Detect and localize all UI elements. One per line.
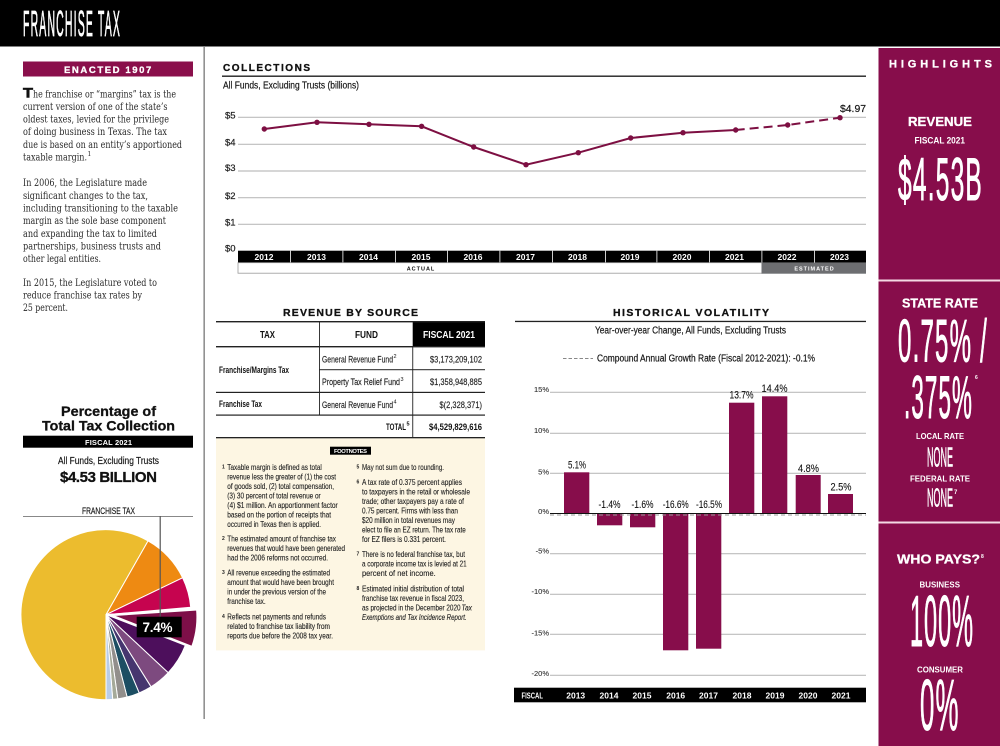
table: Property Tax Relief Fund [322, 377, 400, 388]
header band with page title [0, 0, 1000, 46]
footnotes panel: amount that would have been brought [227, 578, 335, 587]
table: $4,529,829,616 [429, 422, 482, 433]
intro text block: significant changes to the tax, [23, 191, 148, 202]
y axis labels: $4 [225, 138, 236, 148]
year axis bar: 2015 [412, 252, 431, 262]
footnotes panel [216, 438, 485, 650]
highlight: state rate [898, 295, 988, 513]
footnotes panel: a corporate income tax is levied at 21 [362, 560, 467, 568]
pie heading: FISCAL 2021 [85, 438, 132, 447]
footnotes panel: Exemptions and Tax Incidence Report. [362, 613, 467, 622]
panel: historical volatility bar chart [514, 307, 866, 702]
footnotes panel: franchise tax revenue in fiscal 2023, [362, 594, 464, 603]
intro text block: 25 percent. [23, 303, 68, 314]
pie heading: All Funds, Excluding Trusts [58, 455, 159, 467]
fiscal year axis bar: 2019 [766, 690, 785, 700]
year axis bar: 2017 [516, 252, 535, 262]
footnotes panel: 2 [222, 536, 225, 542]
actual and estimated key: ACTUAL [407, 266, 435, 272]
intro text block: due is based on an entity’s apportioned [23, 140, 182, 151]
y axis labels: $1 [225, 217, 236, 228]
footnotes panel: Estimated initial distribution of total [362, 584, 464, 593]
year axis bar: 2022 [778, 252, 797, 262]
table: Franchise/Margins Tax [219, 365, 289, 375]
y axis percent labels: 10% [534, 426, 549, 435]
y axis percent labels [531, 385, 549, 678]
intro text block: In 2015, the Legislature voted to [23, 278, 157, 289]
fiscal year axis bar: 2020 [799, 690, 818, 700]
highlight: state rate: 6 [975, 375, 978, 381]
volatility heading: Year-over-year Change, All Funds, Excluding Trusts [595, 326, 786, 336]
panel: highlights sidebar [878, 48, 1000, 746]
footnotes panel: based on the portion of receipts that [227, 510, 332, 520]
y axis labels [225, 110, 236, 254]
footnotes panel: Taxable margin is defined as total [227, 463, 322, 472]
year axis bar: 2018 [568, 252, 587, 262]
header band with page title: FRANCHISE TAX [23, 3, 121, 44]
footnotes panel: Tax [462, 603, 473, 612]
highlight: who pays: CONSUMER [917, 665, 963, 675]
table: $(2,328,371) [440, 400, 482, 411]
collections heading [222, 63, 866, 92]
collections line [262, 103, 866, 167]
volatility heading [515, 307, 866, 336]
bar value labels: 13.7% [730, 390, 754, 402]
year axis bar [238, 251, 866, 263]
bar value labels: 5.1% [568, 460, 586, 472]
y axis percent labels: -20% [531, 669, 549, 678]
collections heading: COLLECTIONS [223, 63, 310, 74]
footnotes panel: All revenue exceeding the estimated [227, 569, 330, 578]
footnotes panel: (4) $1 million. An apportionment factor [227, 501, 338, 510]
footnotes panel: revenue less the greater of (1) the cost [227, 472, 337, 482]
pie heading: Percentage of [61, 403, 156, 419]
footnotes panel: franchise tax. [227, 597, 266, 606]
fiscal year axis bar [514, 688, 866, 702]
table: General Revenue Fund [322, 400, 393, 411]
year axis bar: 2019 [621, 252, 640, 262]
growth rate legend: Compound Annual Growth Rate (Fiscal 2012-2021): -0.1% [597, 354, 815, 365]
bar value labels: -1.6% [632, 499, 654, 511]
footnotes panel: trade; other taxpayers pay a rate of [362, 497, 465, 506]
fiscal year axis bar: 2017 [699, 690, 718, 700]
table: General Revenue Fund [322, 354, 393, 366]
year axis bar: 2013 [307, 252, 326, 262]
footnotes panel: A tax rate of 0.375 percent applies [362, 478, 462, 487]
fiscal year axis bar: FISCAL [522, 690, 543, 700]
franchise tax leader line [160, 516, 161, 617]
footnotes panel: elect to file an EZ return. The tax rate [362, 526, 466, 534]
y axis labels: $0 [225, 244, 236, 254]
footnotes panel: The estimated amount of franchise tax [227, 535, 336, 544]
callout: 7.4 percent: 7.4% [142, 620, 172, 635]
y axis percent labels: -5% [536, 546, 549, 556]
bar value labels: -1.4% [598, 499, 621, 511]
year axis bar: 2012 [255, 252, 274, 262]
year axis bar: 2016 [464, 252, 483, 262]
bar value labels: -16.5% [696, 499, 722, 511]
intro text block: margin as the sole base component [23, 216, 166, 227]
footnotes panel: 3 [222, 570, 225, 576]
footnotes panel: 1 [222, 464, 225, 470]
y axis labels: $3 [225, 163, 236, 174]
enacted banner: ENACTED 1907 [64, 65, 153, 76]
y axis percent labels: 15% [534, 385, 549, 394]
footnotes panel: related to franchise tax liability from [227, 622, 330, 631]
pie heading: $4.53 BILLION [60, 469, 157, 486]
footnotes panel: reports due before the 2008 tax year. [227, 632, 333, 641]
year axis bar: 2021 [725, 252, 744, 262]
footnotes panel: (3) 30 percent of total revenue or [227, 492, 321, 500]
intro text block: of doing business in Texas. The tax [23, 127, 167, 138]
footnotes panel: May not sum due to rounding. [362, 463, 444, 472]
pie heading: FRANCHISE TAX [82, 506, 135, 517]
highlight: state rate: LOCAL RATE [916, 431, 964, 441]
y axis percent labels: -10% [531, 587, 549, 596]
callout: 7.4 percent [137, 617, 182, 637]
footnotes panel: revenues that would have been generated [227, 544, 345, 553]
fiscal year axis bar: 2018 [733, 690, 752, 700]
footnotes panel: for EZ filers is 0.331 percent. [362, 535, 446, 544]
fiscal year axis bar: 2015 [633, 690, 652, 700]
footnotes panel: percent of net income. [362, 569, 436, 578]
highlight: state rate: STATE RATE [902, 295, 978, 310]
revenue heading: REVENUE BY SOURCE [283, 307, 418, 319]
footnotes panel: as projected in the December 2020 [362, 603, 461, 612]
y axis labels: $5 [225, 110, 236, 122]
fiscal year axis bar: 2013 [566, 690, 585, 700]
table: TOTAL [386, 422, 406, 432]
highlight: state rate: NONE [927, 483, 953, 513]
footnotes panel: 6 [356, 480, 360, 486]
highlight: revenue: FISCAL 2021 [914, 135, 966, 146]
bar value labels: 2.5% [830, 482, 852, 494]
table [216, 321, 485, 438]
pie heading [23, 403, 193, 517]
footnotes panel: to taxpayers in the retail or wholesale [362, 488, 470, 496]
table: TAX [260, 329, 275, 341]
actual and estimated key: ESTIMATED [794, 266, 835, 272]
footnotes panel: 4 [222, 614, 225, 620]
panel: revenue by source table [216, 307, 485, 650]
footnotes panel: in under the previous version of the [227, 588, 326, 597]
highlight: revenue: REVENUE [908, 114, 972, 129]
intro text block: partnerships, business trusts and [23, 242, 161, 252]
table: 2 [394, 354, 397, 360]
year axis bar: 2023 [830, 252, 849, 262]
year axis bar: 2020 [673, 252, 692, 262]
collections heading: All Funds, Excluding Trusts (billions) [223, 80, 359, 92]
panel: collections line chart [222, 63, 866, 274]
highlight: who pays: 8 [981, 554, 984, 560]
intro text block: 1 [88, 151, 91, 158]
highlight: who pays: WHO PAYS? [897, 551, 980, 566]
highlight: who pays [897, 551, 984, 746]
intro text block: other legal entities. [23, 254, 101, 265]
fiscal year axis bar: 2021 [832, 690, 851, 700]
y axis labels: $2 [225, 191, 236, 202]
table: $3,173,209,102 [430, 354, 482, 366]
table: 3 [400, 377, 404, 383]
year axis bar: 2014 [359, 252, 378, 262]
table: FISCAL 2021 [423, 329, 475, 341]
bar value labels: 14.4% [762, 383, 788, 395]
collections line: $4.97 [840, 103, 866, 115]
pie heading: Total Tax Collection [42, 418, 175, 434]
highlight: state rate: FEDERAL RATE [910, 474, 970, 484]
highlight: revenue [898, 114, 983, 213]
bars [564, 396, 853, 650]
intro text block: In 2006, the Legislature made [23, 178, 147, 189]
footnotes panel: 8 [356, 586, 360, 592]
intro text block: and expanding the tax to limited [23, 229, 157, 240]
enacted banner [23, 62, 193, 76]
volatility heading: HISTORICAL VOLATILITY [613, 307, 769, 319]
intro text block: he franchise or “margins” tax is the [33, 90, 176, 100]
highlight: who pays: BUSINESS [920, 580, 960, 590]
table: 4 [394, 400, 397, 406]
footnotes panel: $20 million in total revenues may [362, 516, 455, 525]
footnotes panel: had the 2006 reforms not occurred. [227, 554, 328, 563]
pie chart [21, 530, 198, 700]
y axis percent labels: -15% [531, 628, 549, 638]
actual and estimated key [238, 263, 866, 274]
intro text block: including transitioning to the taxable [23, 204, 178, 214]
intro text block [23, 85, 182, 314]
footnotes panel: 0.75 percent. Firms with less than [362, 506, 458, 516]
footnotes panel: FOOTNOTES [334, 449, 367, 455]
panel: percentage of total tax collection [21, 403, 198, 700]
table: FUND [355, 329, 378, 341]
bar value labels [568, 383, 852, 511]
bar value labels: 4.8% [798, 463, 819, 475]
intro text block: taxable margin. [23, 152, 87, 164]
intro text block: reduce franchise tax rates by [23, 290, 142, 302]
y axis percent labels: 5% [538, 468, 549, 476]
highlights heading: HIGHLIGHTS [889, 59, 996, 71]
highlight: state rate: 7 [954, 490, 958, 496]
intro text block: oldest taxes, levied for the privilege [23, 114, 169, 126]
footnotes panel: of goods sold, (2) total compensation, [227, 482, 334, 491]
fiscal year axis bar: 2016 [666, 690, 685, 700]
footnotes panel: There is no federal franchise tax, but [362, 550, 466, 559]
intro text block: T [23, 85, 34, 101]
footnotes panel: 5 [356, 464, 360, 470]
fiscal year axis bar: 2014 [600, 690, 619, 700]
panel: enacted intro [23, 62, 193, 314]
table: $1,358,948,885 [430, 377, 482, 388]
intro text block: current version of one of the state’s [23, 102, 168, 113]
footnotes panel: occurred in Texas then is applied. [227, 520, 321, 529]
table: Franchise Tax [219, 399, 262, 409]
footnotes panel: Reflects net payments and refunds [227, 613, 326, 622]
table: 5 [406, 422, 410, 428]
footnotes panel: 7 [356, 552, 360, 558]
bar value labels: -16.6% [663, 499, 689, 511]
y axis percent labels: 0% [538, 507, 549, 516]
